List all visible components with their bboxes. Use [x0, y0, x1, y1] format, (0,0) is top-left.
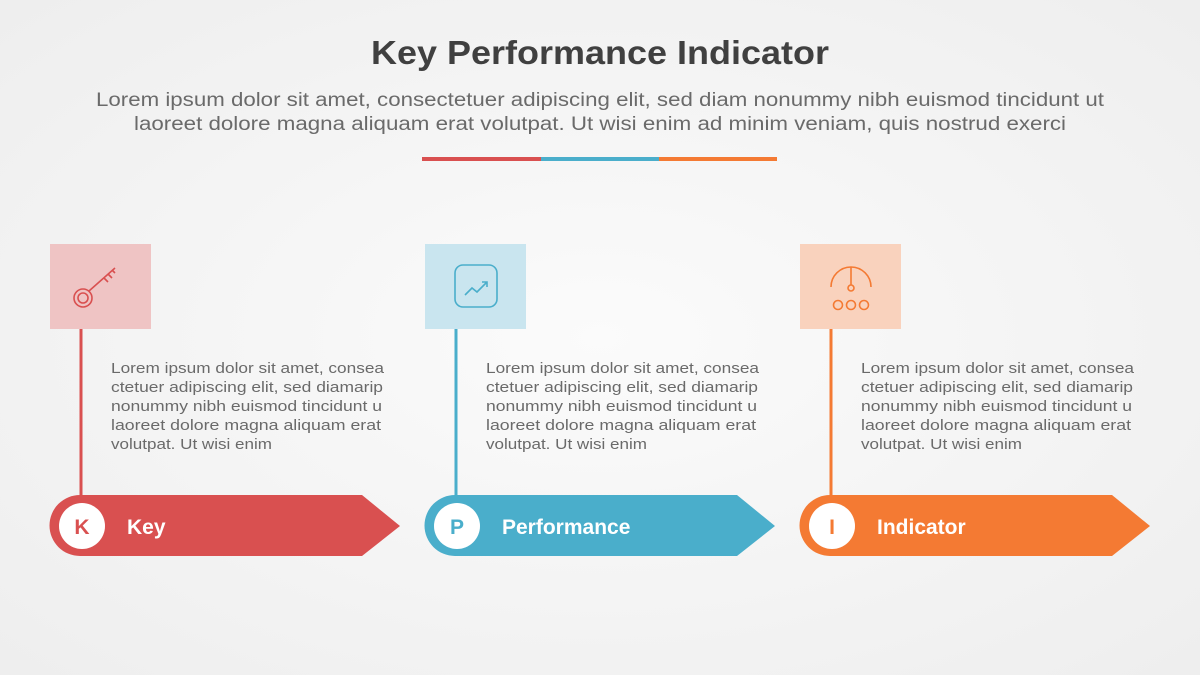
text block: performance: Lorem ipsum dolor sit amet, consea [486, 361, 760, 377]
banner: performance: P [450, 516, 464, 539]
text block: performance: laoreet dolore magna aliquam erat [486, 418, 756, 434]
subtitle: Lorem ipsum dolor sit amet, consectetuer adipiscing elit, sed diam nonummy nibh euismod tincidunt ut [96, 90, 1105, 111]
text block: indicator: Lorem ipsum dolor sit amet, consea [861, 361, 1135, 377]
panel: indicator [800, 244, 1150, 556]
icon box: indicator [800, 244, 901, 329]
text block: performance: volutpat. Ut wisi enim [486, 437, 647, 453]
icon box: performance [425, 244, 526, 329]
panel: performance [424, 244, 775, 556]
panel: key [49, 244, 400, 556]
text block: key: nonummy nibh euismod tincidunt u [111, 399, 382, 415]
banner: indicator [800, 495, 1150, 556]
text block: performance [486, 361, 760, 453]
banner: key: K [74, 516, 90, 539]
text block: performance: ctetuer adipiscing elit, sed diamarip [486, 380, 758, 396]
text block: indicator [861, 361, 1135, 453]
text block: performance: nonummy nibh euismod tincidunt u [486, 399, 757, 415]
banner: key [49, 495, 400, 556]
banner: indicator: Indicator [877, 516, 966, 539]
banner: performance: Performance [502, 516, 630, 539]
title: Key Performance Indicator [371, 34, 829, 71]
title underline [422, 157, 777, 161]
text block: indicator: nonummy nibh euismod tincidunt u [861, 399, 1132, 415]
text block: key: ctetuer adipiscing elit, sed diamarip [111, 380, 383, 396]
text block: indicator: laoreet dolore magna aliquam erat [861, 418, 1131, 434]
text block: key: volutpat. Ut wisi enim [111, 437, 272, 453]
text block: key [111, 361, 385, 453]
text block: key: Lorem ipsum dolor sit amet, consea [111, 361, 385, 377]
banner: performance [424, 495, 775, 556]
text block: indicator: ctetuer adipiscing elit, sed diamarip [861, 380, 1133, 396]
banner: indicator: I [829, 516, 835, 539]
subtitle [96, 90, 1105, 135]
text block: key: laoreet dolore magna aliquam erat [111, 418, 381, 434]
icon box: key [50, 244, 151, 329]
subtitle: laoreet dolore magna aliquam erat volutpat. Ut wisi enim ad minim veniam, quis nostrud exerci [134, 114, 1066, 135]
text block: indicator: volutpat. Ut wisi enim [861, 437, 1022, 453]
banner: key: Key [127, 516, 166, 539]
